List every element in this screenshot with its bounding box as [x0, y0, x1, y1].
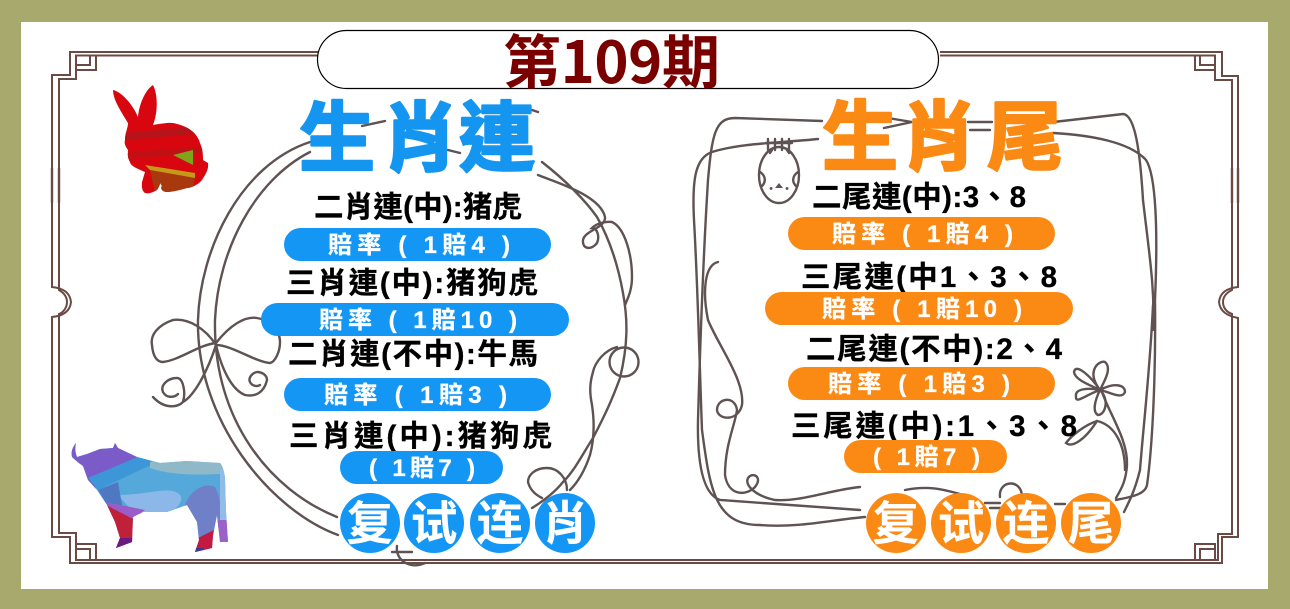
heading char: 肖 — [901, 76, 977, 186]
heading char: 連 — [459, 77, 535, 187]
badges: 复试连尾: 尾 — [1068, 485, 1114, 554]
panel: zodiac tail — [765, 76, 1121, 554]
ornamental brown border — [52, 52, 1238, 563]
row 4 label: 三肖連(中):猪狗虎 — [289, 420, 552, 453]
row 3 odds pill: 賠率 ( 1賠3 ) — [828, 371, 1010, 398]
icon: colourful bull — [72, 443, 228, 552]
badges: 复试连肖: 试 — [410, 485, 458, 554]
row 4 label: 三尾連(中):1、3、8 — [791, 410, 1077, 443]
icon: line flower — [1066, 362, 1127, 498]
row 1 odds pill — [284, 228, 551, 261]
row 3 label: 二肖連(不中):牛馬 — [288, 338, 538, 371]
right flourish frame — [693, 114, 1156, 526]
row 4 odds pill: ( 1賠7 ) — [369, 455, 475, 482]
badges: 复试连尾: 连 — [1002, 485, 1050, 554]
row 3 label: 二尾連(不中):2、4 — [806, 333, 1063, 366]
row 2 label: 三尾連(中1、3、8 — [801, 261, 1057, 294]
panel: zodiac link — [261, 77, 595, 554]
icon: red rabbit — [113, 85, 208, 194]
row 1 label: 二尾連(中):3、8 — [812, 181, 1026, 214]
row 2 odds pill: 賠率 ( 1賠10 ) — [319, 307, 517, 334]
heading char: 肖 — [382, 77, 458, 187]
row 2 odds pill — [261, 303, 569, 336]
row 2 label: 三肖連(中):猪狗虎 — [286, 267, 538, 300]
title pill — [318, 16, 938, 100]
row 4 odds pill: ( 1賠7 ) — [873, 444, 980, 471]
row 1 odds pill: 賠率 ( 1賠4 ) — [328, 232, 510, 259]
row 4 odds pill — [340, 451, 503, 484]
heading: 生肖尾: 生 — [822, 76, 898, 186]
row 3 odds pill — [284, 378, 551, 411]
heading char: 尾 — [987, 76, 1063, 186]
heading: 生肖連: 生 — [299, 77, 375, 187]
row 3 odds pill — [788, 367, 1055, 400]
row 1 label: 二肖連(中):猪虎 — [314, 191, 522, 224]
row 2 odds pill: 賠率 ( 1賠10 ) — [822, 296, 1022, 323]
icon: hanging ornament — [759, 139, 799, 203]
badges: 复试连尾: 试 — [938, 485, 984, 554]
badges: 复试连肖: 连 — [476, 485, 524, 554]
badges: 复试连肖: 肖 — [542, 485, 588, 554]
row 2 odds pill — [765, 292, 1073, 325]
row 1 odds pill — [788, 217, 1055, 250]
left flourish wreath with bow — [152, 79, 638, 565]
badges: 复试连尾 — [866, 485, 1121, 554]
title text: 第109期 — [503, 16, 720, 100]
row 1 odds pill: 賠率 ( 1賠4 ) — [832, 221, 1013, 248]
row 4 odds pill — [844, 440, 1007, 473]
badges: 复试连尾: 复 — [872, 485, 920, 554]
row 3 odds pill: 賠率 ( 1賠3 ) — [324, 382, 507, 409]
badges: 复试连肖: 复 — [346, 485, 394, 554]
badges: 复试连肖 — [340, 485, 595, 554]
